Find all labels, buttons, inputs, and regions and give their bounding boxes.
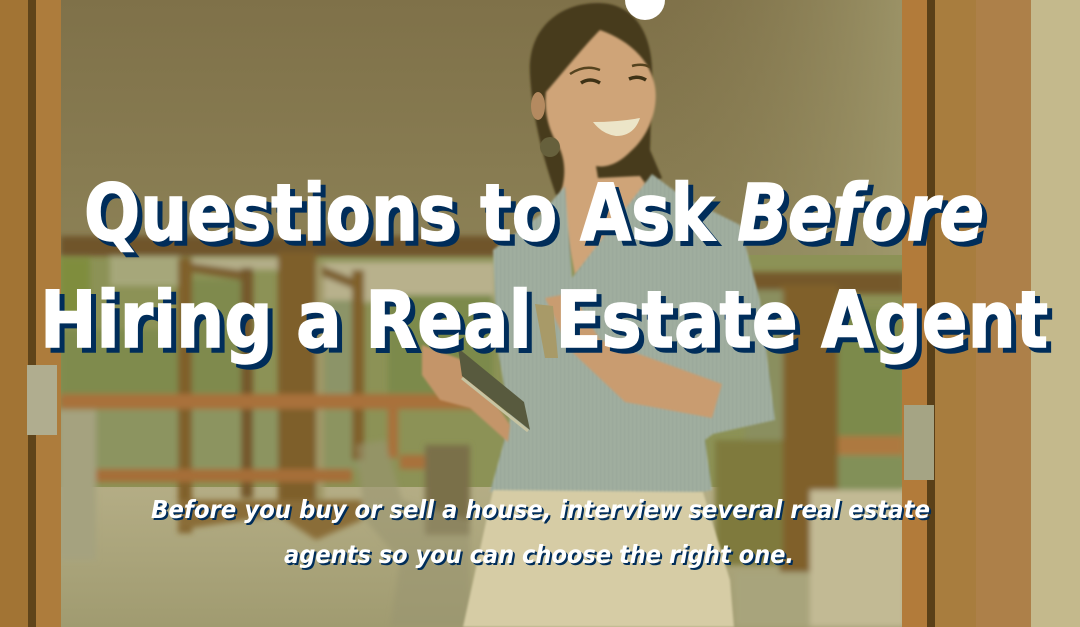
earring <box>540 137 560 157</box>
ear <box>531 92 545 120</box>
subtitle line 2 shadow: agents so you can choose the right one. <box>286 542 796 571</box>
white circle at top <box>625 0 665 20</box>
door frame left <box>0 0 61 627</box>
hinge left <box>27 365 57 435</box>
title line 1: Questions to Ask Before <box>84 169 984 259</box>
hair <box>530 3 662 205</box>
woman <box>422 3 775 627</box>
face, neck and chest <box>546 30 656 275</box>
subtitle line 1 shadow: Before you buy or sell a house, interview several real estate <box>153 497 932 526</box>
tablet <box>458 348 530 430</box>
subtitle line 1: Before you buy or sell a house, interview several real estate <box>151 495 930 524</box>
shirt <box>490 174 775 505</box>
keys <box>535 304 558 358</box>
title <box>40 169 1053 371</box>
trousers <box>463 490 734 627</box>
hinge right <box>904 405 934 480</box>
subtitle line 2: agents so you can choose the right one. <box>284 540 794 569</box>
eyes and brows <box>570 65 650 74</box>
title line 1 shadow: Questions to Ask Before <box>89 174 989 264</box>
forearm and hand with keys <box>545 293 722 418</box>
door frame right <box>902 0 1080 627</box>
subtitle <box>151 495 932 571</box>
background windows, frames and railing <box>58 236 905 627</box>
smile <box>593 118 640 136</box>
left hand <box>422 345 510 442</box>
